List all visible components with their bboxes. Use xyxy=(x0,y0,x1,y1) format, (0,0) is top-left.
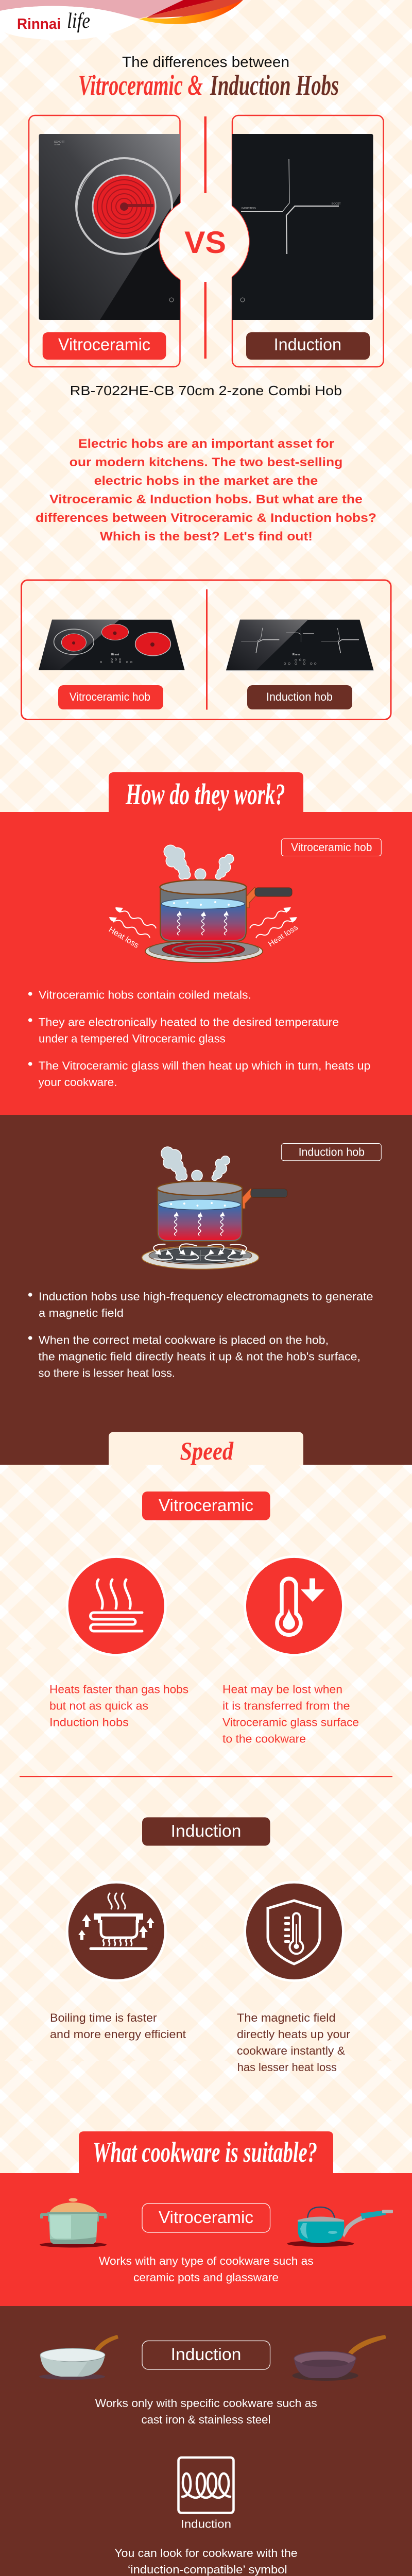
list: how induction hobs work xyxy=(28,1290,373,1380)
list: how vitroceramic hobs work: your cookware. xyxy=(38,1076,117,1089)
section: what cookware is suitable, induction xyxy=(0,2306,412,2576)
product caption: RB-7022HE-CB 70cm 2-zone Combi Hob xyxy=(70,383,342,398)
title: The differences between xyxy=(122,54,289,71)
intro paragraph: Which is the best? Let's find out! xyxy=(100,530,313,544)
list: how induction hobs work: When the correct metal cookware is placed on the hob, xyxy=(39,1333,329,1347)
label: Induction hob: Induction hob xyxy=(299,1146,365,1158)
intro paragraph: Vitroceramic & Induction hobs. But what are the xyxy=(49,493,363,506)
induction hob image xyxy=(232,134,373,320)
arrows: heat loss left and right xyxy=(110,908,296,938)
label: Vitroceramic: Vitroceramic xyxy=(159,2208,253,2227)
logo: Rinnai life: Rinnai xyxy=(17,16,61,32)
icon: teal saucepan xyxy=(287,2207,393,2247)
intro paragraph: electric hobs in the market are the xyxy=(94,474,318,488)
text: induction boiling time: Boiling time is faster xyxy=(50,2011,157,2024)
text: vitroceramic heat loss: it is transferred from the xyxy=(222,1699,350,1712)
induction hob image: Rinnai xyxy=(293,653,301,656)
icon: silver wok xyxy=(39,2335,118,2380)
heading tab: Speed: Speed xyxy=(180,1436,234,1465)
button: Induction hob xyxy=(247,685,352,709)
section: what cookware is suitable, vitroceramic xyxy=(0,2131,412,2306)
icon: shield with thermometer xyxy=(245,1882,344,1980)
list: how vitroceramic hobs work xyxy=(28,988,370,1089)
text: heat loss labels: Heat loss xyxy=(267,923,300,948)
list: how vitroceramic hobs work: They are electronically heated to the desired temperature xyxy=(38,1016,339,1028)
VS badge: VS xyxy=(184,225,226,260)
text: vitroceramic cookware: Works with any type of cookware such as xyxy=(99,2255,314,2267)
text: vitroceramic cookware: ceramic pots and glassware xyxy=(133,2271,279,2284)
button: Vitroceramic (speed) xyxy=(142,1492,270,1520)
label: Vitroceramic xyxy=(142,2204,270,2232)
section: how do they work, vitroceramic xyxy=(0,772,412,1115)
button: Vitroceramic hob xyxy=(58,685,163,709)
vitroceramic hob image: CERAN xyxy=(54,144,61,146)
logo: Rinnai life xyxy=(17,9,90,33)
vitroceramic hob image xyxy=(39,134,180,320)
intro paragraph: differences between Vitroceramic & Induction hobs? xyxy=(36,511,376,525)
heading tab: What cookware is suitable?: What cookware is suitable? xyxy=(93,2137,317,2168)
button: Induction hob: Induction hob xyxy=(266,690,333,703)
list: how induction hobs work: the magnetic field directly heats it up & not the hob's surface, xyxy=(38,1350,360,1363)
text: vitroceramic heat loss: to the cookware xyxy=(222,1733,306,1745)
list: how induction hobs work: Induction hobs use high-frequency electromagnets to generate xyxy=(39,1290,373,1303)
illustration: pot on induction hob with magnetic field xyxy=(142,1147,287,1269)
text: vitroceramic heating speed: but not as quick as xyxy=(49,1699,148,1712)
text: vitroceramic cookware xyxy=(99,2255,314,2284)
header swoosh xyxy=(0,0,243,40)
text: vitroceramic heating speed: Induction hobs xyxy=(49,1716,129,1729)
button: Induction (speed) xyxy=(142,1817,270,1845)
heading tab: How do they work? xyxy=(109,772,303,812)
list: how induction hobs work: so there is lesser heat loss. xyxy=(38,1366,175,1380)
label: Induction hob xyxy=(281,1144,381,1161)
list: how vitroceramic hobs work: The Vitroceramic glass will then heat up which in turn, heats up xyxy=(38,1059,370,1072)
text: induction cookware xyxy=(95,2397,317,2426)
icon: induction compatible symbol xyxy=(178,2458,234,2513)
panel: induction hob comparison card xyxy=(232,115,383,367)
list: how vitroceramic hobs work: Vitroceramic hobs contain coiled metals. xyxy=(39,988,251,1002)
title: Induction Hobs xyxy=(210,70,339,101)
text: look for symbol xyxy=(114,2547,298,2576)
icon: purple wok xyxy=(293,2335,386,2381)
label: Induction xyxy=(246,332,370,360)
button: Vitroceramic (speed): Vitroceramic xyxy=(159,1496,253,1515)
label: Induction: Induction xyxy=(274,335,341,354)
induction hob image xyxy=(226,620,374,671)
button: Vitroceramic hob: Vitroceramic hob xyxy=(70,690,150,703)
icon: pot heating fast xyxy=(67,1882,165,1980)
heading tab: How do they work?: How do they work? xyxy=(125,777,285,811)
text: vitroceramic heat loss xyxy=(222,1683,359,1745)
list: how induction hobs work: a magnetic field xyxy=(39,1307,124,1319)
label: Induction: Induction xyxy=(171,2345,241,2364)
vitroceramic hob image: SCHOTT xyxy=(54,141,65,144)
logo: Rinnai life: life xyxy=(67,9,90,33)
text: induction boiling time xyxy=(50,2011,186,2041)
panel: two hobs comparison xyxy=(22,580,391,719)
VS badge xyxy=(159,116,249,359)
label: Vitroceramic hob: Vitroceramic hob xyxy=(291,841,372,854)
vitroceramic hob image xyxy=(39,620,185,670)
intro paragraph xyxy=(36,437,376,544)
text: vitroceramic heating speed xyxy=(49,1683,188,1729)
button: Induction (speed): Induction xyxy=(171,1821,241,1840)
text: induction direct heating: has lesser heat loss xyxy=(237,2061,337,2074)
label: Vitroceramic: Vitroceramic xyxy=(58,335,150,354)
icon: stock pot xyxy=(40,2198,107,2247)
heading tab: Speed xyxy=(109,1432,303,1465)
text: vitroceramic heat loss: Heat may be lost when xyxy=(222,1683,342,1696)
title xyxy=(78,54,339,101)
section: how do they work, induction xyxy=(0,1115,412,1465)
panel: vitroceramic hob comparison card xyxy=(29,115,180,367)
label: Vitroceramic hob xyxy=(281,839,381,856)
label: Vitroceramic xyxy=(43,332,166,360)
icon: thermometer with down arrow xyxy=(245,1556,344,1655)
text: induction direct heating xyxy=(237,2011,350,2074)
text: heat loss labels: Heat loss xyxy=(107,925,141,950)
icon: heating coil xyxy=(67,1556,165,1655)
label: Induction xyxy=(142,2341,270,2369)
text: heat loss labels xyxy=(107,923,300,950)
text: induction boiling time: and more energy efficient xyxy=(50,2028,186,2041)
text: induction direct heating: directly heats up your xyxy=(237,2028,350,2041)
heading tab: What cookware is suitable? xyxy=(79,2131,333,2173)
induction hob image: INDUCTION xyxy=(242,207,256,210)
text: induction direct heating: The magnetic field xyxy=(237,2011,336,2024)
text: induction cookware: Works only with specific cookware such as xyxy=(95,2397,317,2410)
vitroceramic hob image: Rinnai xyxy=(111,653,119,656)
text: look for symbol: ‘induction-compatible’ symbol xyxy=(128,2563,287,2576)
intro paragraph: our modern kitchens. The two best-selling xyxy=(70,455,342,469)
text: look for symbol: You can look for cookware with the xyxy=(114,2547,298,2560)
text: induction direct heating: cookware instantly & xyxy=(237,2044,345,2057)
arrows: magnetic field loops xyxy=(153,1244,250,1260)
illustration: pot on vitroceramic hob with heat loss xyxy=(107,845,300,962)
title: Vitroceramic & xyxy=(78,70,203,101)
text: vitroceramic heat loss: Vitroceramic glass surface xyxy=(222,1716,359,1729)
text: Induction symbol caption: Induction xyxy=(181,2517,231,2531)
text: vitroceramic heating speed: Heats faster than gas hobs xyxy=(49,1683,188,1696)
induction hob image: BOOST xyxy=(332,202,341,206)
text: induction cookware: cast iron & stainless steel xyxy=(141,2413,271,2426)
list: how vitroceramic hobs work: under a tempered Vitroceramic glass xyxy=(39,1032,226,1045)
intro paragraph: Electric hobs are an important asset for xyxy=(78,437,334,451)
